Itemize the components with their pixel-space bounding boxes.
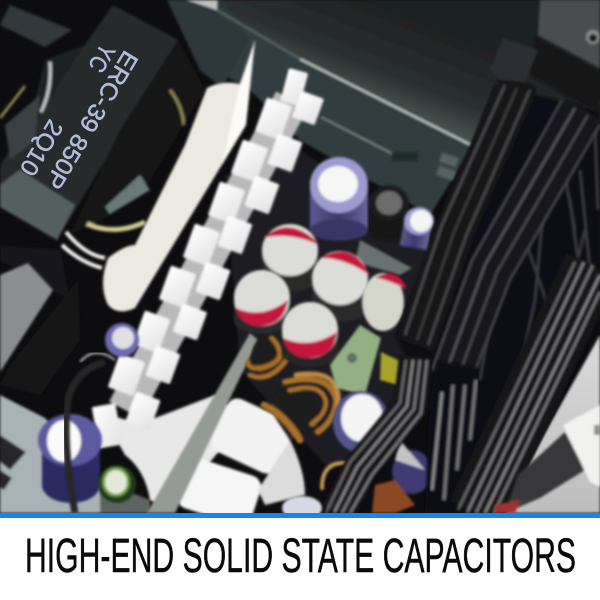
white connector and its wires	[495, 405, 600, 513]
top right connector	[490, 0, 600, 115]
foil block and lower left circuit board	[0, 263, 150, 513]
circuit board under capacitors	[225, 150, 430, 470]
solid state capacitor 4	[282, 302, 338, 367]
upper housing panel	[167, 0, 600, 215]
caption background	[0, 518, 600, 600]
white cylinder capacitors	[178, 396, 307, 513]
green capacitor	[98, 465, 136, 503]
transformer label: 2Q10	[14, 115, 68, 180]
cable bundle: diagonal strands	[432, 100, 600, 385]
dark cable mass	[395, 85, 600, 513]
blue divider bar	[0, 513, 600, 518]
large purple capacitor	[310, 157, 368, 241]
small purple capacitor left	[105, 323, 139, 357]
solid state capacitor 3	[234, 270, 290, 334]
small purple capacitor	[400, 207, 434, 250]
background floor	[500, 335, 600, 513]
large purple capacitor lower left	[38, 414, 102, 503]
solid state capacitor 1	[262, 224, 318, 292]
cable bundle: rear strands	[480, 130, 598, 380]
transformer label: ERC-39 850P	[40, 46, 143, 194]
cable bundle: top left strands	[405, 80, 530, 345]
transformer label: YC	[82, 39, 120, 77]
heatsink	[92, 68, 324, 510]
solid state capacitor 2	[312, 251, 368, 322]
cable bundle: lower left	[326, 357, 427, 513]
cable bundle: central vertical	[432, 365, 476, 513]
black capacitor	[369, 185, 409, 241]
black cable with loop	[66, 362, 105, 513]
cable bundle: right diagonal	[458, 262, 600, 513]
transformer	[0, 5, 205, 300]
metal blade	[147, 333, 258, 513]
solid state capacitor 5	[362, 273, 404, 331]
purple capacitor with white top	[333, 391, 389, 453]
insulator sheet	[62, 40, 255, 311]
circuit board traces	[392, 152, 459, 181]
green toroid	[330, 325, 381, 395]
hidden capacitor under cables	[280, 442, 429, 513]
yellow capsule	[380, 352, 402, 385]
copper coils	[248, 336, 345, 488]
